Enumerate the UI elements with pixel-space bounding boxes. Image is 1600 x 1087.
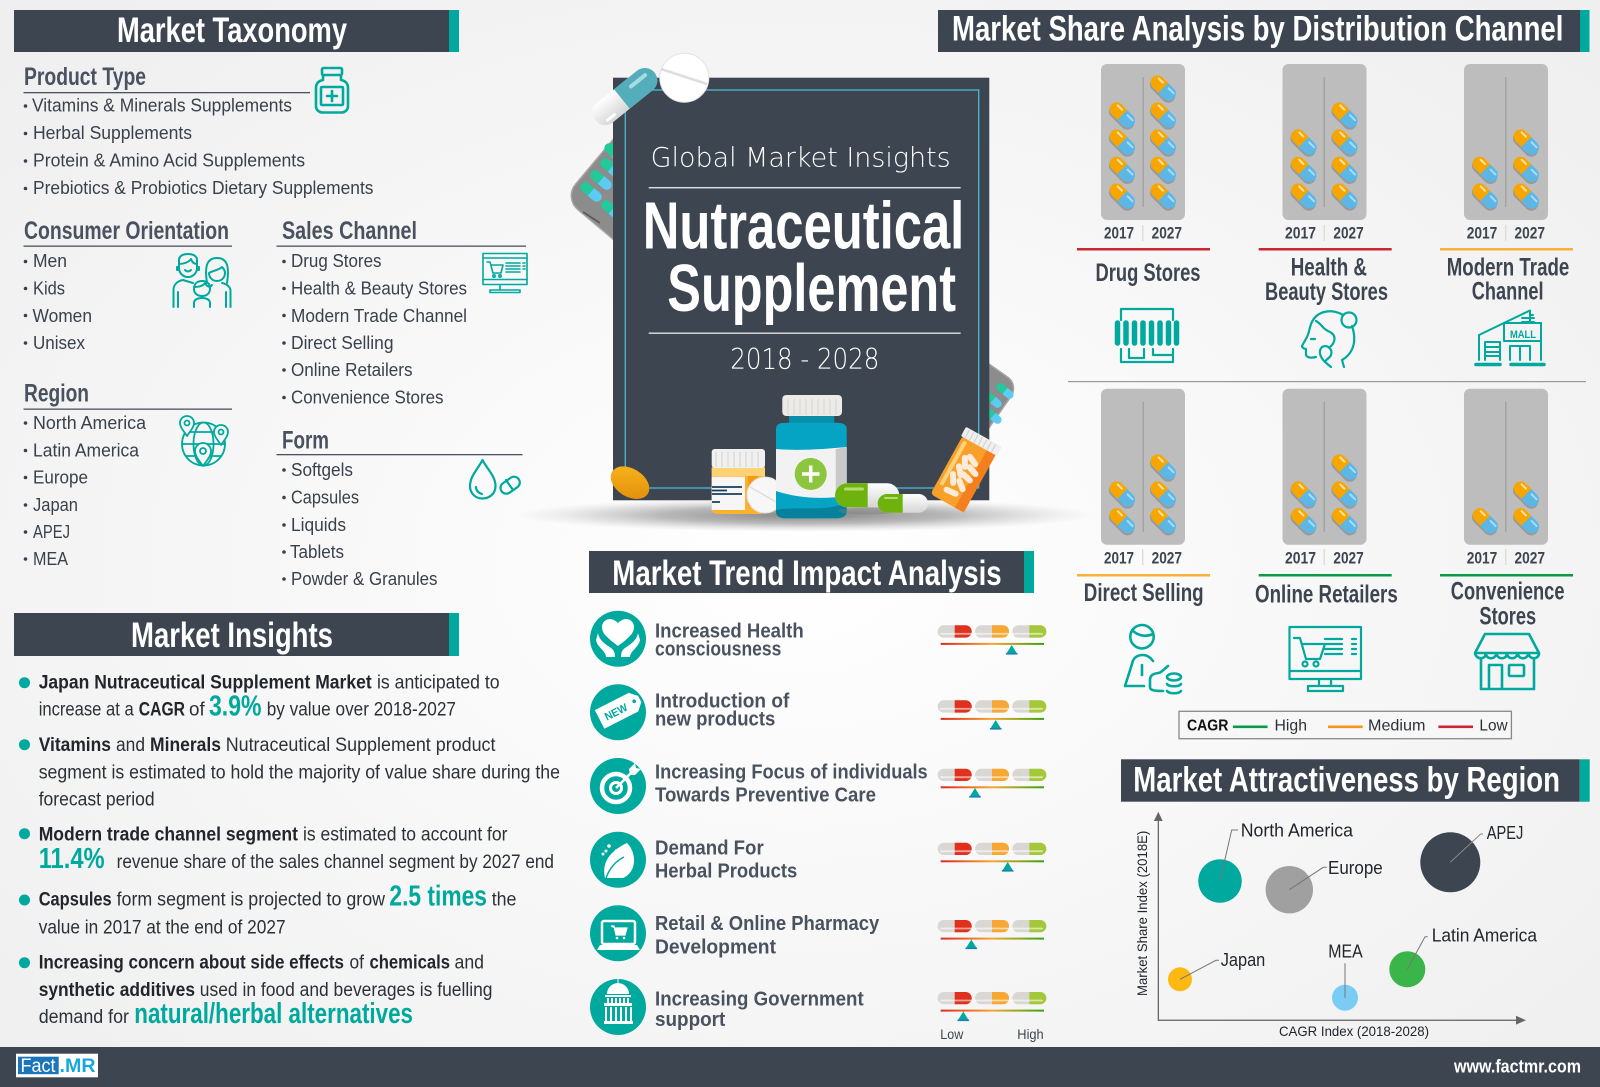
icon: supplement bottle xyxy=(316,68,348,112)
insight: natural alternatives: natural/herbal alternatives xyxy=(134,998,413,1030)
channel: drug stores: 2017 xyxy=(1104,225,1134,243)
insight: natural alternatives: synthetic additives xyxy=(39,980,195,1001)
insight: japan: Japan Nutraceutical Supplement Market xyxy=(39,673,372,694)
channel: health and beauty stores xyxy=(1259,64,1392,367)
region list: Region xyxy=(24,380,89,408)
channel: direct selling: Direct Selling xyxy=(1084,579,1204,607)
insight: modern trade: is estimated to account for xyxy=(303,825,508,846)
channel: convenience stores: Stores xyxy=(1479,602,1536,630)
bubble: north america xyxy=(1198,820,1354,903)
insight: japan: CAGR xyxy=(139,700,185,721)
trend row: government support xyxy=(590,979,1046,1035)
sales channel list: Convenience Stores xyxy=(291,388,444,408)
bubble: japan: Japan xyxy=(1221,949,1265,970)
illustration: round tablet xyxy=(660,53,709,102)
bubble: latin america: Latin America xyxy=(1432,925,1538,946)
gauge scale labels xyxy=(940,1026,1044,1042)
region list: Latin America xyxy=(33,440,140,460)
panel: central title card xyxy=(515,53,1095,532)
insight: japan xyxy=(19,673,500,723)
title rules xyxy=(649,187,961,334)
logo: Fact.MR xyxy=(16,1054,98,1077)
trend row: retail and online pharmacy: Retail & Online Pharmacy xyxy=(655,913,880,935)
insight: capsules: the xyxy=(492,890,516,911)
insight: natural alternatives: used in food and beverages is fuelling xyxy=(200,980,493,1001)
axis label: cagr: CAGR Index (2018-2028) xyxy=(1279,1023,1429,1039)
region list: Japan xyxy=(33,495,78,515)
sales channel list: Drug Stores xyxy=(291,251,382,271)
sales channel list: Sales Channel xyxy=(282,217,417,245)
illustration: left blister pack xyxy=(564,106,710,256)
insight: modern trade: revenue share of the sales channel segment by 2027 end xyxy=(117,852,554,873)
trend row: new products: new products xyxy=(655,708,775,730)
heading: market trend impact analysis: Market Trend Impact Analysis xyxy=(612,554,1002,593)
illustration: top capsule xyxy=(588,63,662,130)
logo: Fact.MR: Fact xyxy=(20,1056,56,1077)
bubble: latin america xyxy=(1389,925,1538,987)
illustration: small yellow bottle xyxy=(712,449,765,514)
illustration: blister mark xyxy=(583,212,600,223)
insight: japan: 3.9% xyxy=(209,691,262,723)
gauge scale labels: High xyxy=(1017,1026,1044,1042)
form list: Capsules xyxy=(291,488,359,508)
trend row: retail and online pharmacy xyxy=(590,905,1046,961)
insight: natural alternatives: of xyxy=(350,953,365,974)
bubble: apej: APEJ xyxy=(1487,822,1523,843)
region list xyxy=(24,380,232,569)
insight: natural alternatives: chemicals xyxy=(370,953,450,974)
CAGR legend: Medium xyxy=(1368,718,1425,735)
insight: modern trade: 11.4% xyxy=(39,843,105,875)
form list: Form xyxy=(282,426,329,454)
consumer orientation list: Unisex xyxy=(33,333,85,353)
channel: drug stores xyxy=(1077,64,1210,362)
trend row: government support: Increasing Government xyxy=(655,989,864,1011)
channel: convenience stores: 2017 xyxy=(1467,550,1497,568)
illustration: green capsules xyxy=(835,483,928,514)
channel: convenience stores: 2027 xyxy=(1514,550,1545,568)
trend row: government support: support xyxy=(655,1009,726,1031)
title card inner frame xyxy=(625,90,979,488)
insight: capsules: value in 2017 at the end of 2027 xyxy=(39,917,286,938)
channel: direct selling: 2017 xyxy=(1104,550,1134,568)
trend row: new products: Introduction of xyxy=(655,691,790,713)
channel: modern trade channel: 2017 xyxy=(1467,225,1497,243)
consumer orientation list: Women xyxy=(32,306,92,326)
sales channel list: Health & Beauty Stores xyxy=(291,278,467,298)
product type list: Herbal Supplements xyxy=(33,123,192,143)
region list: APEJ xyxy=(33,522,70,542)
form list: Softgels xyxy=(291,460,353,480)
insight: vitamins and minerals: forecast period xyxy=(39,789,155,810)
insight: capsules: form segment is projected to grow xyxy=(117,890,385,911)
sales channel list: Direct Selling xyxy=(291,333,394,353)
insight: modern trade xyxy=(19,825,554,875)
icon: shopping mall: MALL xyxy=(1510,329,1536,341)
bubble: apej xyxy=(1420,822,1523,892)
insight: japan: of xyxy=(189,700,205,721)
channel: modern trade channel: 2027 xyxy=(1514,225,1545,243)
trend row: new products: NEW xyxy=(603,702,630,723)
illustration: softgel xyxy=(605,460,655,506)
insight: vitamins and minerals: Nutraceutical Supplement product xyxy=(226,735,496,756)
heading: market taxonomy: Market Taxonomy xyxy=(117,11,347,50)
bubble: mea: MEA xyxy=(1328,941,1363,962)
channel: health and beauty stores: 2017 xyxy=(1285,225,1316,243)
illustration: right blister pack xyxy=(892,336,1019,467)
channel: online retailers: 2017 xyxy=(1285,550,1316,568)
chart axes xyxy=(1154,812,1526,1025)
trend row: herbal products: Herbal Products xyxy=(655,861,797,883)
title card background xyxy=(613,78,989,500)
insight: natural alternatives: Increasing concern about side effects xyxy=(39,953,344,974)
trend row: retail and online pharmacy: Development xyxy=(655,936,776,958)
illustration: right blister pills xyxy=(983,382,1015,425)
insight: modern trade: Modern trade channel segment xyxy=(39,825,299,846)
channel: direct selling: 2027 xyxy=(1152,550,1182,568)
trend row: health consciousness: consciousness xyxy=(655,638,781,660)
form list: Liquids xyxy=(291,515,346,535)
product type list: Vitamins & Minerals Supplements xyxy=(32,96,292,116)
channel: health and beauty stores: 2027 xyxy=(1333,225,1364,243)
trend row: preventive care: Increasing Focus of individuals xyxy=(655,761,928,783)
insight: japan: increase at a xyxy=(39,700,134,721)
sales channel list xyxy=(276,217,526,408)
illustration: left blister pills xyxy=(578,141,628,222)
insight: japan: by value over 2018-2027 xyxy=(267,700,456,721)
trend row: preventive care: Towards Preventive Care xyxy=(655,785,876,807)
main title xyxy=(643,188,964,326)
product type list: Product Type xyxy=(24,63,146,91)
insight: vitamins and minerals: segment is estimated to hold the majority of value share during the xyxy=(39,762,560,783)
insight: natural alternatives: demand for xyxy=(39,1007,130,1028)
region list: MEA xyxy=(33,549,68,569)
channel: health and beauty stores: Health & xyxy=(1291,253,1367,281)
bubble: europe xyxy=(1266,857,1383,913)
consumer orientation list: Men xyxy=(33,251,67,271)
bubble: japan xyxy=(1168,949,1265,991)
insight: vitamins and minerals: Minerals xyxy=(150,735,221,756)
website url: www.factmr.com xyxy=(1453,1057,1581,1077)
illustration: orange pill bottle xyxy=(929,427,1002,513)
channel: online retailers: Online Retailers xyxy=(1255,580,1398,608)
icon: pharmacy storefront xyxy=(1118,309,1176,362)
icon: woman face xyxy=(1302,311,1356,367)
icon: convenience storefront xyxy=(1475,634,1539,689)
insight: capsules xyxy=(19,881,516,938)
consumer orientation list: Kids xyxy=(33,278,65,298)
icon: direct seller with coins xyxy=(1125,625,1181,693)
illustration: tablet by bottle xyxy=(747,477,783,513)
bubble: europe: Europe xyxy=(1328,857,1383,878)
row divider xyxy=(1068,381,1586,382)
sales channel list: Online Retailers xyxy=(291,360,412,380)
region list: Europe xyxy=(33,468,88,488)
heading: market insights xyxy=(14,613,459,656)
logo: Fact.MR: .MR xyxy=(60,1056,96,1077)
insight: capsules: Capsules xyxy=(39,890,112,911)
channel: health and beauty stores: Beauty Stores xyxy=(1265,278,1388,306)
CAGR legend xyxy=(1179,711,1511,739)
illustration: large teal bottle xyxy=(776,395,847,518)
form list xyxy=(276,426,522,589)
channel: drug stores: 2027 xyxy=(1152,225,1182,243)
channel: modern trade channel: Channel xyxy=(1472,277,1544,305)
icon: online store screen xyxy=(483,254,527,292)
form list: Powder & Granules xyxy=(291,569,438,589)
panel: market attractiveness by region xyxy=(1121,759,1590,1039)
sales channel list: Modern Trade Channel xyxy=(291,306,467,326)
channel: direct selling xyxy=(1077,389,1210,693)
region list: North America xyxy=(33,413,147,433)
CAGR legend: Low xyxy=(1479,718,1508,735)
channel: drug stores: Drug Stores xyxy=(1096,259,1200,287)
icon: family xyxy=(174,254,230,307)
product type list: Prebiotics & Probiotics Dietary Supplements xyxy=(33,178,374,198)
icon: shopping mall xyxy=(1476,310,1544,364)
panel: market taxonomy xyxy=(14,10,527,589)
axis label: market share: Market Share Index (2018E) xyxy=(1134,831,1150,996)
insight: vitamins and minerals xyxy=(19,735,560,810)
form list: Tablets xyxy=(290,542,344,562)
insight: capsules: 2.5 times xyxy=(389,881,487,913)
trend row: preventive care xyxy=(590,758,1046,814)
main title: Nutraceutical xyxy=(643,188,964,263)
bubble: mea xyxy=(1328,941,1363,1011)
product type list xyxy=(24,63,374,198)
icon: globe with pins xyxy=(180,416,228,466)
title text: global market insights: Global Market Insights xyxy=(651,143,951,174)
icon: online shop monitor xyxy=(1290,627,1361,691)
channel: online retailers: 2027 xyxy=(1333,550,1364,568)
trend row: health consciousness xyxy=(590,611,1046,667)
panel: market insights xyxy=(14,613,560,1030)
CAGR legend: High xyxy=(1274,718,1307,735)
trend row: new products xyxy=(590,684,1046,740)
gauge scale labels: Low xyxy=(940,1026,964,1042)
channel: online retailers xyxy=(1255,389,1398,691)
years: 2018 - 2028 xyxy=(730,343,879,376)
CAGR legend: CAGR xyxy=(1187,718,1229,735)
insight: vitamins and minerals: Vitamins xyxy=(39,735,111,756)
consumer orientation list: Consumer Orientation xyxy=(24,217,229,245)
panel: market share analysis by distribution channel xyxy=(938,10,1590,739)
product type list: Protein & Amino Acid Supplements xyxy=(33,150,305,170)
main title: Supplement xyxy=(667,251,956,326)
insight: natural alternatives: and xyxy=(454,953,484,974)
icon: drop and pill xyxy=(470,460,522,498)
trend row: health consciousness: Increased Health xyxy=(655,620,804,642)
heading: market insights: Market Insights xyxy=(131,616,333,655)
insight: vitamins and minerals: and xyxy=(116,735,145,756)
channel: convenience stores xyxy=(1440,389,1573,689)
channel: modern trade channel xyxy=(1440,64,1573,364)
panel: market trend impact analysis xyxy=(589,551,1046,1042)
trend row: herbal products xyxy=(590,832,1046,888)
bubble: north america: North America xyxy=(1241,820,1354,841)
insight: natural alternatives xyxy=(19,953,492,1030)
insight: japan: is anticipated to xyxy=(377,673,500,694)
heading: market taxonomy xyxy=(14,10,459,52)
trend row: herbal products: Demand For xyxy=(655,837,764,859)
floor shadow xyxy=(515,498,1095,532)
consumer orientation list xyxy=(24,217,232,353)
footer xyxy=(0,1047,1600,1087)
